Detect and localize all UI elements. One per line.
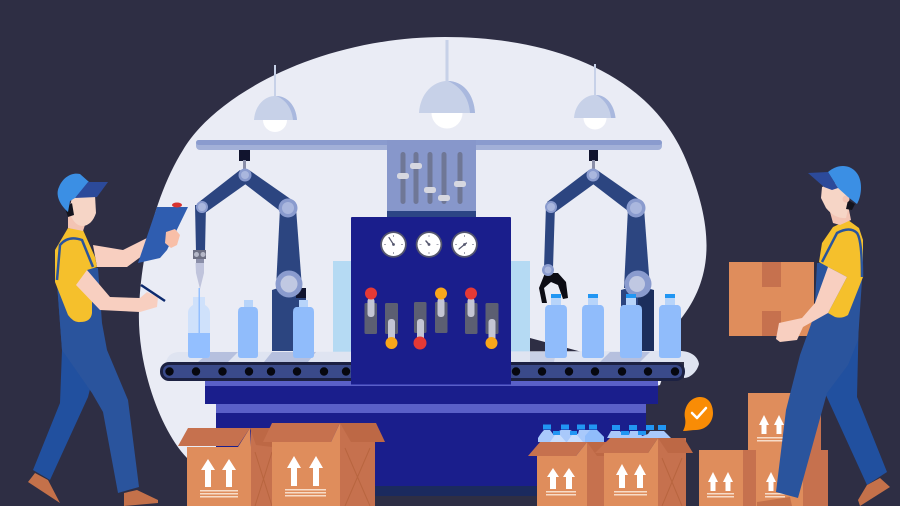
stacked box back: [748, 393, 821, 450]
hair: [846, 200, 855, 210]
neck: [830, 205, 851, 225]
capped bottles: [545, 294, 681, 358]
lamp right: [574, 64, 616, 130]
gauge: [380, 231, 407, 258]
left robot arm: [193, 150, 306, 351]
ceiling rail: [196, 140, 662, 150]
ear: [842, 196, 850, 202]
control panel: [351, 217, 511, 385]
pencil: [141, 285, 165, 301]
back shoe: [858, 478, 890, 506]
back arm: [93, 238, 150, 267]
shirt: [819, 220, 863, 318]
face: [69, 195, 96, 226]
cap: [58, 174, 108, 212]
back leg and shoe: [28, 283, 100, 503]
filling nozzle: [193, 250, 206, 289]
open box centre: [263, 423, 385, 506]
carried box: [729, 262, 814, 336]
stacked box front left: [699, 450, 756, 506]
strap: [822, 230, 862, 277]
arm and hand: [776, 267, 847, 342]
capped bottle: [545, 294, 567, 358]
lamp left: [254, 65, 297, 132]
gauge: [451, 231, 478, 258]
right robot arm: [539, 150, 654, 351]
strap: [57, 238, 93, 280]
front arm: [76, 270, 158, 312]
clipboard: [138, 202, 188, 263]
left worker: [28, 174, 188, 506]
overalls and front leg: [57, 268, 139, 493]
holding hand: [165, 229, 180, 248]
front shoe: [124, 490, 158, 506]
lamps: [254, 40, 616, 132]
slider control box: [387, 140, 476, 218]
lamp centre: [419, 40, 475, 128]
capped bottle: [582, 294, 604, 358]
check mark speech bubble: [683, 397, 713, 431]
lever switches: [364, 288, 498, 350]
shirt: [55, 228, 97, 322]
neck: [68, 214, 86, 231]
bottles in boxes: [538, 424, 671, 442]
gripper claw: [539, 273, 568, 303]
dark wedge behind bottles: [530, 338, 582, 352]
stacked box front right: [755, 450, 828, 506]
capped bottle: [620, 294, 642, 358]
cap: [808, 166, 861, 204]
empty bottle: [238, 300, 258, 358]
conveyor belt: [160, 362, 685, 381]
overalls and front leg: [776, 263, 862, 498]
open box with bottles right: [595, 438, 693, 506]
open box with bottles left: [528, 442, 612, 506]
empty bottle: [293, 300, 314, 358]
bottle being filled: [188, 288, 210, 358]
background blob: [139, 37, 707, 490]
conveyor table top: [166, 351, 699, 378]
open box left: [178, 428, 290, 506]
capped bottle: [659, 294, 681, 358]
back leg: [825, 310, 887, 485]
hair: [65, 203, 74, 217]
right worker: [757, 166, 890, 506]
gauge: [416, 231, 442, 258]
light blue side panels: [333, 261, 530, 362]
machine base: [205, 381, 658, 496]
face: [821, 182, 849, 218]
front shoe: [757, 497, 792, 506]
